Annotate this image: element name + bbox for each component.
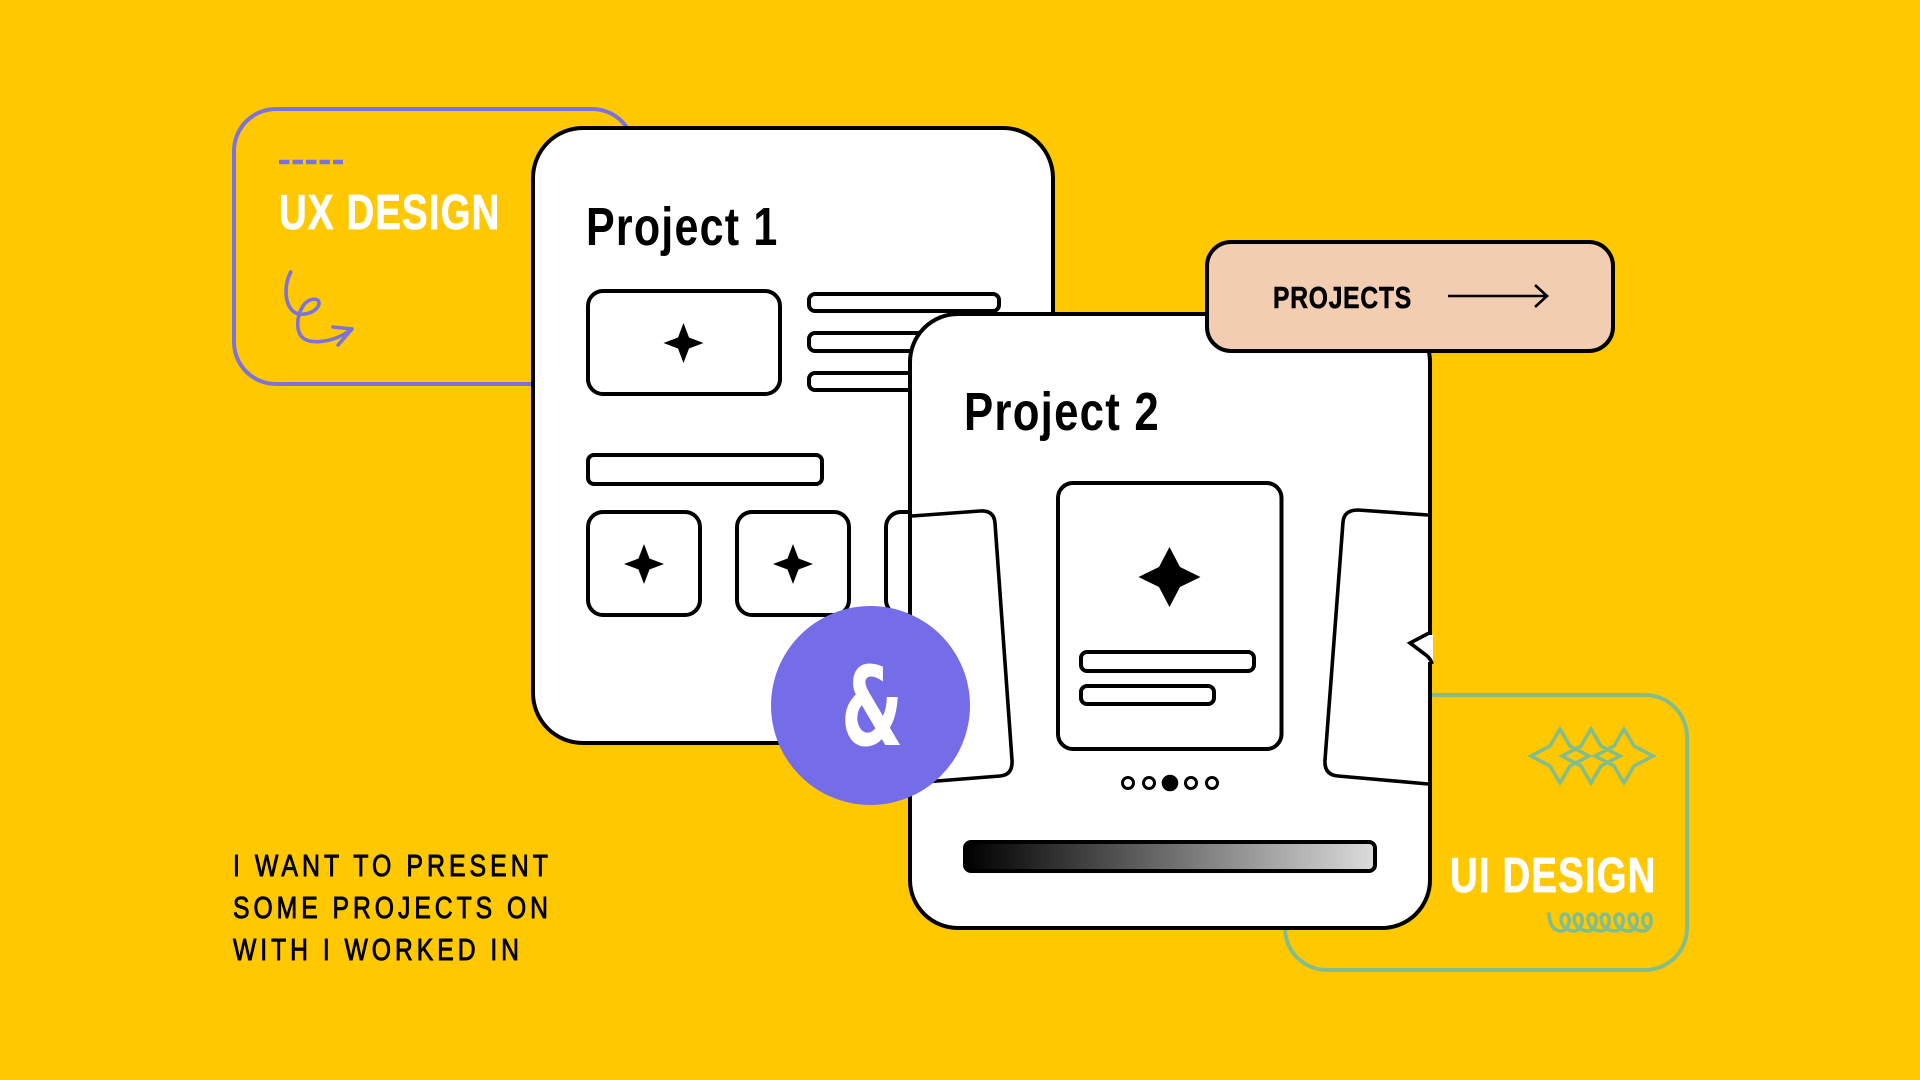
intro text block: SOME PROJECTS ON bbox=[233, 890, 552, 925]
panel: project 1 card bbox=[533, 128, 1053, 743]
carousel card: centre bbox=[1058, 483, 1282, 749]
heading: project 2: Project 2 bbox=[964, 382, 1160, 442]
gradient progress bar bbox=[965, 842, 1375, 871]
ampersand glyph: & bbox=[841, 643, 903, 771]
button label: PROJECTS bbox=[1273, 280, 1412, 315]
icon: three outlined stars bbox=[1531, 729, 1653, 783]
carousel card: right bbox=[1325, 510, 1428, 784]
button: projects bbox=[1207, 242, 1613, 351]
thumbnail 3 bbox=[886, 512, 998, 615]
thumbnail 2 bbox=[737, 512, 849, 615]
icon: star bbox=[773, 544, 813, 584]
panel: project 2 card bbox=[910, 314, 1433, 928]
heading: UI design: UI DESIGN bbox=[1450, 849, 1656, 903]
panel: UX design bbox=[234, 109, 634, 384]
wide bar placeholder bbox=[588, 455, 822, 484]
heading: UX design: UX DESIGN bbox=[279, 186, 500, 240]
text line placeholder 2 bbox=[1081, 686, 1214, 704]
carousel card: left bbox=[912, 511, 1012, 783]
icon: coil scribble bbox=[1549, 914, 1651, 931]
panel: UI design bbox=[1285, 695, 1687, 970]
icon: large star bbox=[1138, 547, 1200, 607]
image placeholder: large bbox=[588, 291, 780, 394]
intro text block: I WANT TO PRESENT bbox=[233, 848, 552, 883]
heading: project 1: Project 1 bbox=[586, 197, 778, 257]
intro text block bbox=[233, 848, 552, 967]
icon: curly arrow bbox=[286, 272, 352, 345]
icon: star bbox=[624, 544, 664, 584]
text line placeholders bbox=[809, 294, 999, 390]
text line placeholder 1 bbox=[1081, 652, 1254, 671]
dashed accent: UX bbox=[279, 160, 343, 164]
intro text block: WITH I WORKED IN bbox=[233, 932, 523, 967]
thumbnail 1 bbox=[588, 512, 700, 615]
icon: star bbox=[664, 323, 704, 363]
badge: ampersand bbox=[771, 606, 970, 805]
pagination dots bbox=[1122, 776, 1218, 790]
arrow bbox=[1448, 285, 1547, 307]
card edge notch bbox=[1410, 632, 1433, 664]
